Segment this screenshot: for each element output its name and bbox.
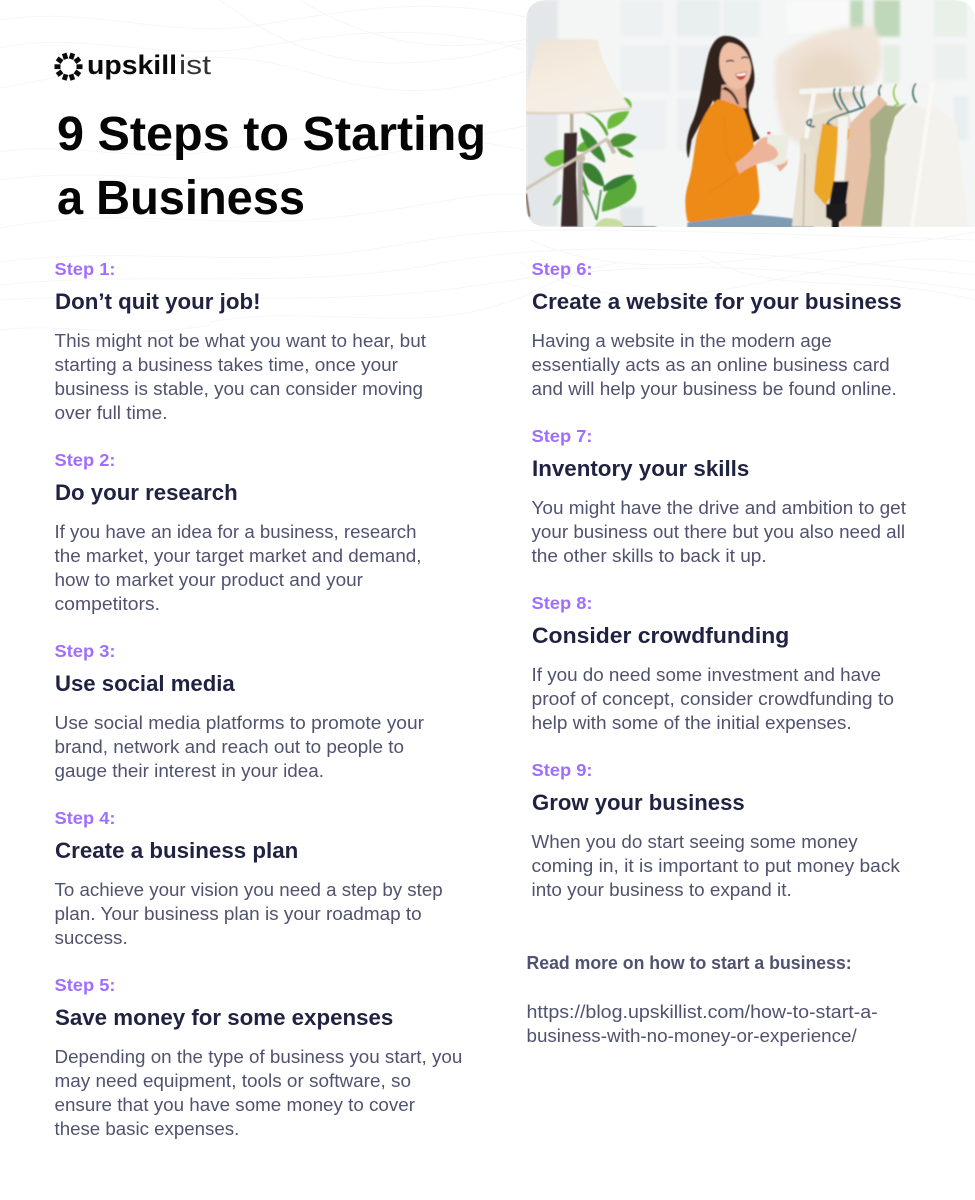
step 9: When you do start seeing some money [532, 832, 858, 852]
step 2: Step 2: [54, 450, 116, 470]
step 6: Create a website for your business [532, 289, 902, 314]
read more link [526, 953, 878, 1046]
step 9: Step 9: [532, 760, 592, 780]
photo: woman with mug beside clothing rack [519, 0, 975, 230]
lamp and plant [519, 39, 656, 230]
step 9: Grow your business [532, 790, 745, 815]
step 7: Step 7: [532, 426, 592, 446]
step 6: Having a website in the modern age [532, 331, 832, 351]
step 1 [54, 259, 426, 423]
step 4: Create a business plan [55, 838, 298, 863]
step 6 [532, 259, 902, 399]
step 8: If you do need some investment and have [532, 665, 881, 685]
step 8: Consider crowdfunding [532, 623, 789, 648]
step 6: and will help your business be found online. [532, 379, 897, 399]
step 4: plan. Your business plan is your roadmap to [54, 904, 422, 924]
step 1: Don’t quit your job! [55, 289, 260, 314]
step 7: You might have the drive and ambition to get [532, 498, 906, 518]
clothing rack [792, 82, 968, 230]
step 5: these basic expenses. [54, 1119, 239, 1139]
step 5: Step 5: [54, 975, 116, 995]
step 5 [54, 975, 462, 1139]
step 1: Step 1: [54, 259, 116, 279]
step 3: Use social media platforms to promote your [54, 713, 424, 733]
step 7: your business out there but you also need all [532, 522, 905, 542]
title [57, 108, 486, 225]
title: a Business [57, 172, 305, 225]
step 1: over full time. [54, 403, 168, 423]
step 2 [54, 450, 422, 614]
read more link: https://blog.upskillist.com/how-to-start-a- [526, 1002, 878, 1022]
step 7 [532, 426, 906, 566]
read more link: business-with-no-money-or-experience/ [526, 1026, 857, 1046]
step 3 [54, 641, 424, 781]
step 1: This might not be what you want to hear, but [54, 331, 426, 351]
step 3: Step 3: [54, 641, 116, 661]
step 4: Step 4: [54, 808, 116, 828]
step 8: help with some of the initial expenses. [532, 713, 852, 733]
step 5: Save money for some expenses [55, 1005, 393, 1030]
step 8: proof of concept, consider crowdfunding to [532, 689, 894, 709]
step 3: brand, network and reach out to people to [54, 737, 404, 757]
title: 9 Steps to Starting [57, 108, 486, 161]
step 4: success. [54, 928, 128, 948]
pampas grass [775, 26, 882, 147]
step 9: coming in, it is important to put money back [532, 856, 901, 876]
step 8: Step 8: [532, 593, 592, 613]
logo wordmark: ist [179, 50, 212, 80]
step 8 [532, 593, 894, 733]
step 7: Inventory your skills [532, 456, 749, 481]
step 2: competitors. [54, 594, 160, 614]
logo wordmark: upskill [87, 50, 177, 80]
step 3: Use social media [55, 671, 235, 696]
step 2: the market, your target market and demand, [54, 546, 422, 566]
step 2: If you have an idea for a business, research [54, 522, 416, 542]
icon: logo ring [52, 49, 85, 84]
step 5: Depending on the type of business you start, you [54, 1047, 462, 1067]
step 5: may need equipment, tools or software, so [54, 1071, 411, 1091]
step 9 [532, 760, 901, 900]
step 9: into your business to expand it. [532, 880, 792, 900]
step 4: To achieve your vision you need a step by step [54, 880, 443, 900]
step 1: starting a business takes time, once your [54, 355, 398, 375]
step 2: how to market your product and your [54, 570, 363, 590]
step 3: gauge their interest in your idea. [54, 761, 324, 781]
step 5: ensure that you have some money to cover [54, 1095, 415, 1115]
step 2: Do your research [55, 480, 238, 505]
read more link: Read more on how to start a business: [526, 953, 852, 973]
step 6: Step 6: [532, 259, 592, 279]
step 4 [54, 808, 443, 948]
woman [685, 36, 813, 230]
step 1: business is stable, you can consider moving [54, 379, 423, 399]
step 7: the other skills to back it up. [532, 546, 767, 566]
logo: upskillist [52, 49, 212, 84]
step 6: essentially acts as an online business card [532, 355, 890, 375]
